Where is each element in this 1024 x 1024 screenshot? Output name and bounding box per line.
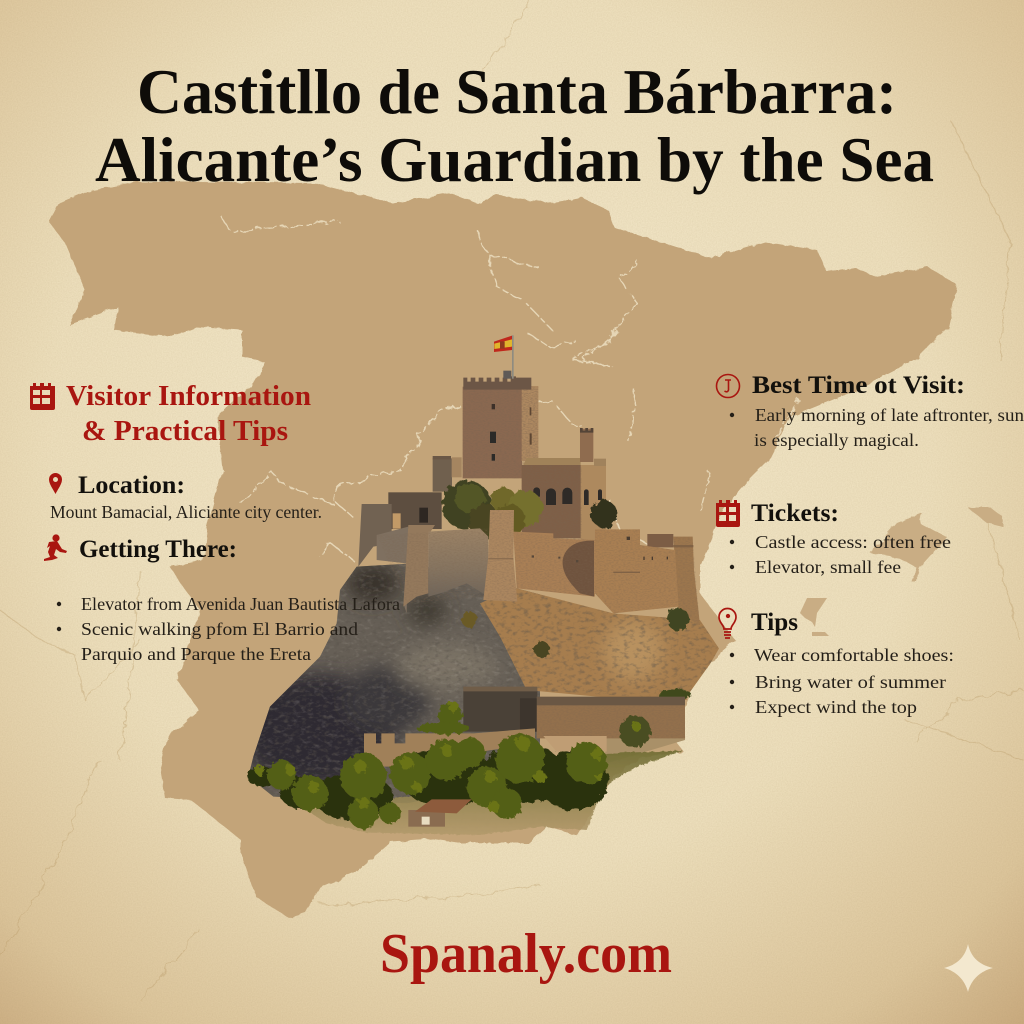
upper trees [442, 480, 617, 539]
best time text: Early morning of late aftronter, sun [755, 405, 1024, 425]
flag [494, 335, 514, 379]
icon: light bulb [719, 608, 736, 638]
icon: clock [716, 374, 740, 398]
icon: sparkle [944, 944, 993, 992]
tips list [730, 645, 954, 717]
right towers [595, 529, 700, 625]
tips list: Expect wind the top [755, 697, 917, 717]
icon: location pin [49, 473, 62, 494]
location heading: Location: [78, 472, 185, 499]
round tower [483, 510, 517, 602]
Mallorca [870, 513, 947, 582]
getting there heading: Getting There: [79, 536, 237, 563]
best time text [730, 405, 1024, 450]
Menorca [967, 507, 1003, 527]
tickets list: Elevator, small fee [755, 557, 901, 577]
bushes on slope [461, 608, 692, 701]
map of Spain [49, 182, 1003, 918]
mainland silhouette [49, 182, 957, 918]
red roofed house [408, 799, 472, 827]
icon: runner [44, 534, 67, 561]
icon: calendar [30, 383, 55, 410]
panel: visitor information [30, 381, 400, 664]
panel: tickets [716, 500, 951, 577]
best time text: is especially magical. [754, 430, 919, 450]
rock texture [253, 564, 540, 798]
website footer: Spanaly.com [380, 923, 672, 985]
rock shadow patches [237, 563, 497, 787]
castle photo on the hill [237, 335, 720, 835]
best time heading: Best Time ot Visit: [752, 372, 965, 399]
foliage shadows [247, 743, 608, 820]
title: Alicante’s Guardian by the Sea [95, 125, 934, 195]
foliage mid tones [267, 703, 651, 829]
tips heading: Tips [751, 609, 798, 636]
title: Castitllo de Santa Bárbarra: [137, 57, 897, 127]
tips list: Wear comfortable shoes: [754, 645, 954, 665]
location text: Mount Bamacial, Aliciante city center. [50, 502, 322, 522]
panel: best time to visit [716, 372, 1024, 450]
tickets list: Castle access: often free [755, 532, 951, 552]
curtain walls [377, 525, 595, 613]
heading: visitor information [66, 381, 311, 447]
sunlit scrub slope [480, 587, 720, 700]
palace block [522, 428, 606, 540]
heading: visitor information: & Practical Tips [82, 416, 288, 447]
getting there list: Parquio and Parque the Ereta [81, 644, 311, 664]
getting there list [57, 594, 400, 664]
bottom grass fringe [307, 751, 683, 835]
tickets heading: Tickets: [751, 500, 839, 527]
hill: rock and scrub [237, 557, 720, 810]
map river cracks [222, 217, 800, 560]
heading: visitor information: Visitor Information [66, 381, 311, 412]
getting there list: Elevator from Avenida Juan Bautista Lafora [81, 594, 400, 614]
panel: tips [719, 608, 954, 717]
foliage highlights [255, 701, 641, 813]
getting there list: Scenic walking pfom El Barrio and [81, 619, 358, 639]
lower foliage [247, 701, 651, 829]
rock base [240, 557, 540, 810]
keep tower [463, 371, 538, 478]
lower fortifications [364, 687, 685, 767]
left small tower and left walls [358, 456, 462, 567]
dry slope under walls [605, 736, 686, 754]
tips list: Bring water of summer [755, 672, 946, 692]
title [95, 57, 934, 195]
icon: tickets calendar [716, 500, 740, 527]
Ibiza [800, 598, 829, 636]
tickets list [730, 532, 951, 577]
